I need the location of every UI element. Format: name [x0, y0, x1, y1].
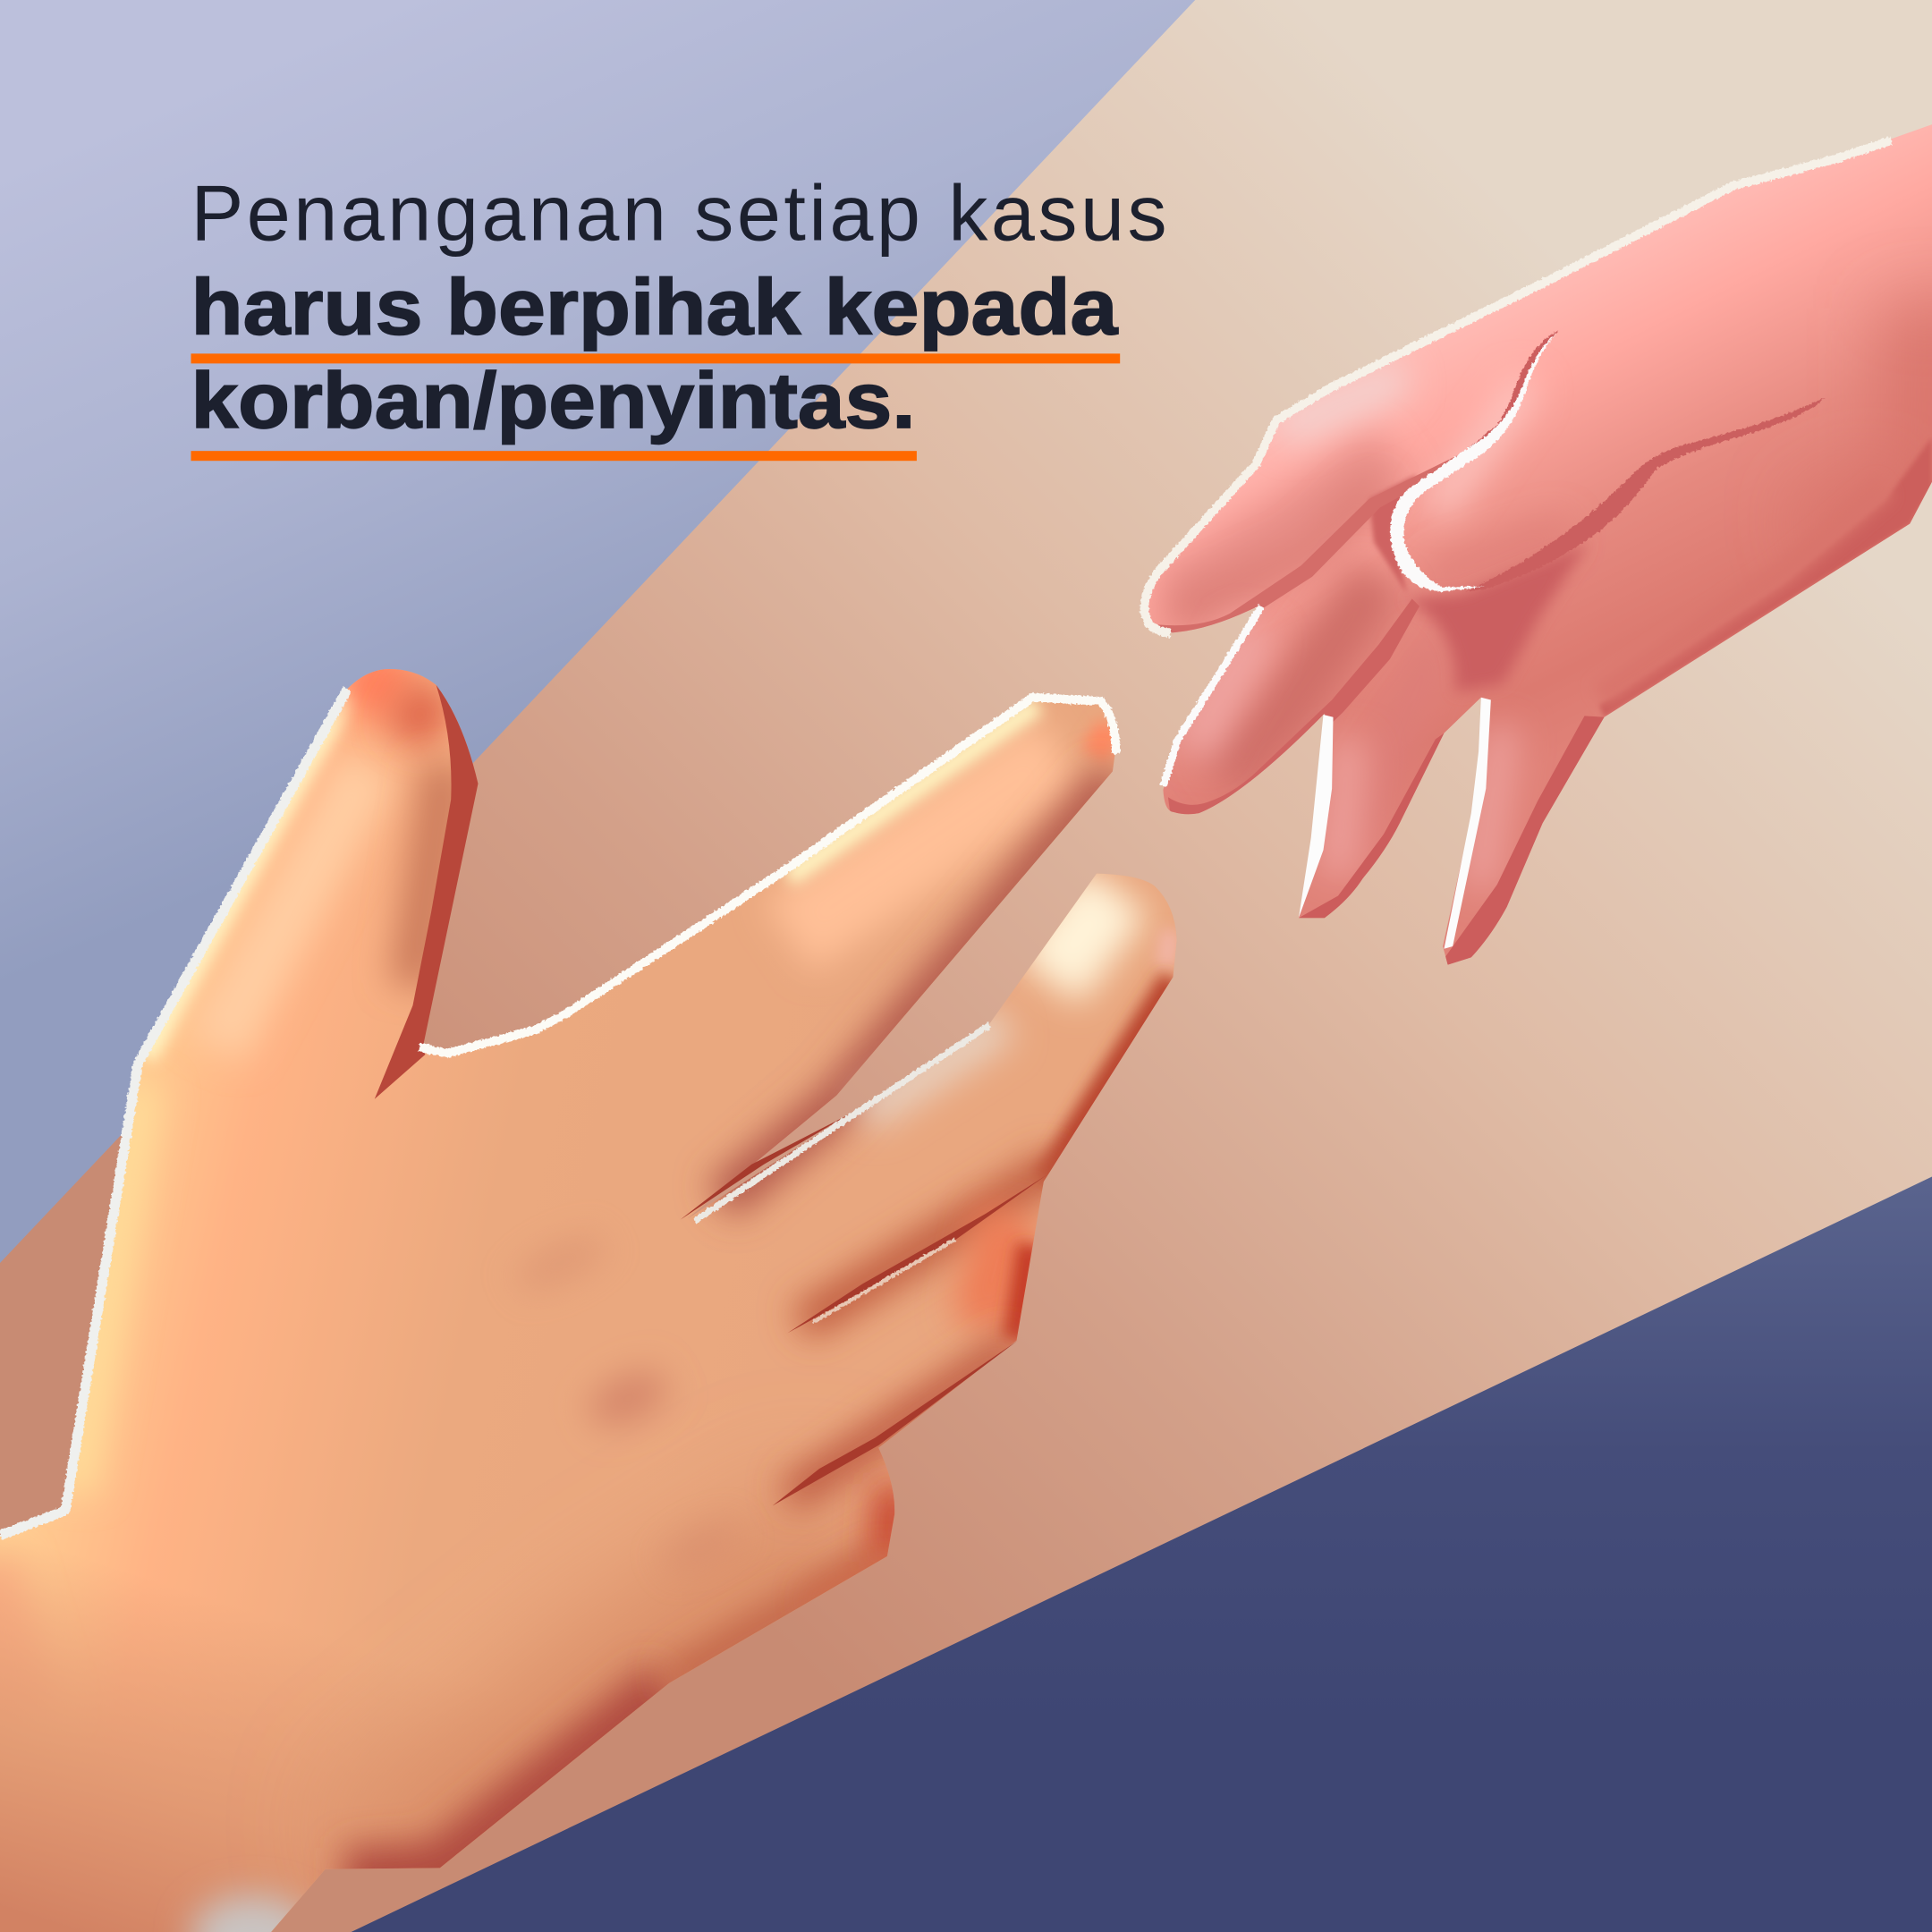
- lower wrist tone: [0, 1584, 365, 1932]
- edge highlight: top of index finger: [419, 698, 1116, 1054]
- edge highlight: crease streak: [813, 1240, 955, 1322]
- edge highlight: second finger: [1163, 606, 1262, 786]
- fourth finger edge: [1444, 716, 1605, 967]
- middle finger shading: [1047, 890, 1115, 979]
- top finger tone: [1171, 456, 1393, 604]
- background: blue upper-left wedge: [0, 0, 1195, 1263]
- edge highlight: finger gap: [695, 1025, 989, 1221]
- third finger edge: [1299, 733, 1444, 920]
- thumb crease shadow: [1466, 330, 1559, 450]
- knuckle marks: [581, 1360, 675, 1436]
- underline two: [191, 451, 917, 461]
- edge highlight: upper back of hand: [1145, 140, 1892, 633]
- second finger shading: [1220, 579, 1380, 776]
- hard shadow: first finger edge: [375, 685, 478, 1099]
- left edge yellow glow: [146, 692, 349, 1057]
- first finger edge: [1158, 453, 1466, 635]
- right wrist shading: [1811, 308, 1932, 542]
- edge highlight: outer left edge: [0, 689, 347, 1535]
- lower hand darkening: [419, 1589, 887, 1922]
- hard shadow: lower finger crease: [787, 1175, 1046, 1334]
- palm dark core: [1404, 542, 1589, 692]
- index finger shading: [789, 751, 1060, 936]
- hard shadow: finger gap crease: [680, 1114, 851, 1220]
- illustration: left reaching hand: [0, 616, 1233, 1932]
- illustration: right reaching hand: [1109, 98, 1932, 986]
- heading line: bold two: korban/penyintas.: [191, 356, 916, 445]
- wrist light patch: [191, 1895, 314, 1932]
- heading line: regular: Penanganan setiap kasus: [191, 169, 1167, 258]
- pinky knuckle shading: [890, 1485, 894, 1563]
- background: navy lower-right wedge: [352, 1177, 1932, 1932]
- crease: wrist line: [1466, 397, 1825, 591]
- heading line: bold one: harus berpihak kepada: [191, 262, 1118, 351]
- edge highlight: fourth finger: [1444, 698, 1491, 949]
- edge highlight: third finger: [1299, 715, 1334, 918]
- ring finger orange panel: [979, 1214, 1011, 1325]
- underline one: [191, 353, 1120, 363]
- back of hand lower strip: [1599, 437, 1932, 717]
- first finger shading: [365, 653, 389, 715]
- hard shadow: knuckle crease: [773, 1341, 1018, 1505]
- third finger shading: [1349, 640, 1436, 851]
- title text block: [191, 169, 1167, 461]
- fourth finger shading: [1479, 727, 1504, 887]
- second finger edge: [1168, 598, 1419, 818]
- top finger shading: [1282, 376, 1404, 431]
- thumb outline highlight: [1390, 333, 1556, 591]
- wrist left tone: [0, 1564, 25, 1725]
